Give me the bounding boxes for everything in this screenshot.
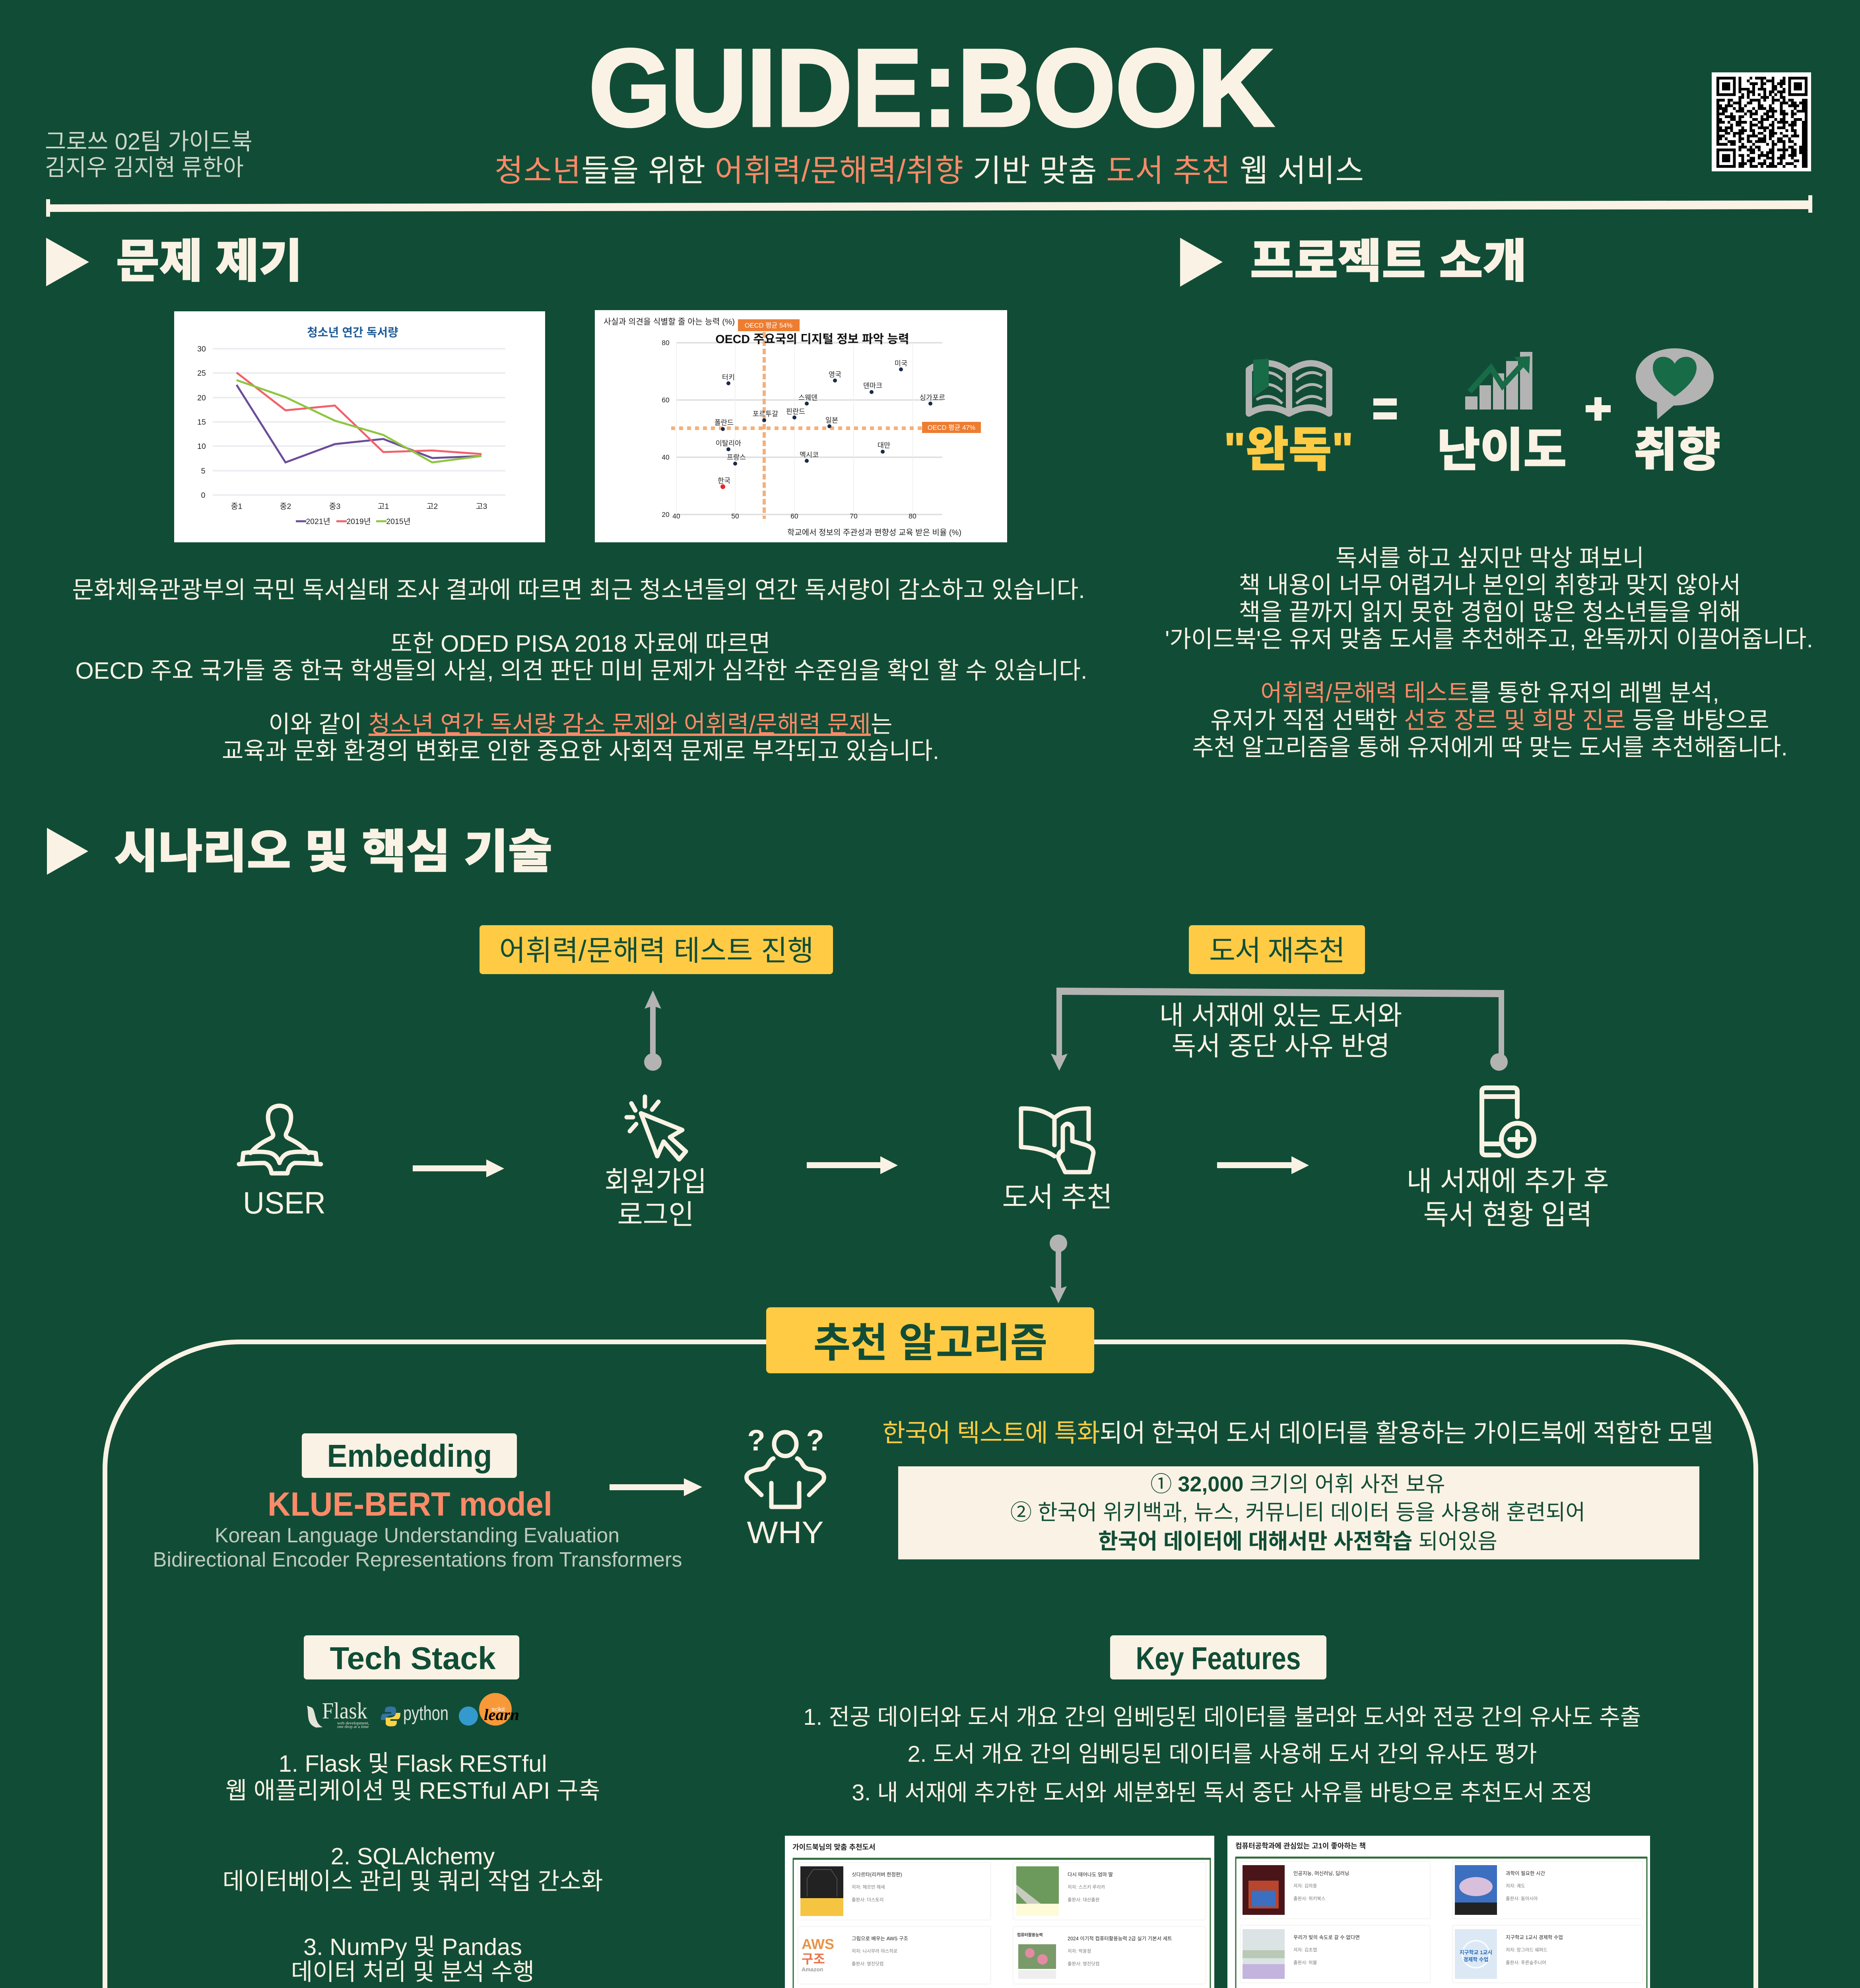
text block: key features list: 2. 도서 개요 간의 임베딩된 데이터를 사용해 도서 간의 유사도 평가 <box>907 1741 1537 1767</box>
label: key features: Key Features <box>1136 1640 1301 1676</box>
line chart: annual reading: 고2 <box>427 502 438 511</box>
loop caption: 독서 중단 사유 반영 <box>1172 1031 1390 1061</box>
screenshot: personalised books: 저자: 스즈키 루리카 <box>1068 1885 1105 1890</box>
label: add to library: 독서 현황 입력 <box>1423 1199 1592 1230</box>
icon: book <box>1249 359 1329 414</box>
text block: tech stack list: 데이터 처리 및 분석 수행 <box>291 1959 534 1985</box>
label: key features <box>1110 1635 1326 1679</box>
scatter chart: OECD digital literacy: 핀란드 <box>786 408 805 415</box>
line chart: annual reading: 0 <box>201 491 206 500</box>
why details box <box>898 1466 1699 1559</box>
label: tech stack: Tech Stack <box>330 1640 496 1676</box>
text block: tech stack list <box>186 1750 639 1988</box>
label: embedding <box>302 1433 517 1478</box>
arrow: to algorithm <box>1050 1235 1067 1303</box>
logos: flask, python, scikit-learn: scikit <box>491 1706 505 1713</box>
screenshot: popular books by major: 저자: 김의중 <box>1293 1883 1317 1889</box>
arrow <box>1217 1156 1309 1174</box>
icon: person questioning <box>747 1424 824 1507</box>
why details box: 한국어 데이터에 대해서만 사전학습 되어있음 <box>1098 1530 1497 1553</box>
arrow <box>807 1156 898 1174</box>
screenshot: personalised books: 2024 이기적 컴퓨터활용능력 2급 실기 기본서 세트 <box>1068 1936 1172 1941</box>
screenshot: personalised books: 저자: 니시무라 야스히로 <box>852 1948 897 1954</box>
team credit <box>45 129 252 181</box>
line chart: annual reading: 중3 <box>329 502 340 511</box>
label: vocabulary test: 어휘력/문해력 테스트 진행 <box>499 935 814 967</box>
scatter chart: OECD digital literacy: 80 <box>909 512 916 520</box>
line chart: annual reading: 2015년 <box>386 517 411 526</box>
arrow <box>413 1159 504 1177</box>
team credit: 그로쓰 02팀 가이드북 <box>45 129 252 155</box>
label: sign up login <box>604 1166 707 1230</box>
scatter chart: OECD digital literacy: 학교에서 정보의 주관성과 편향성 교육 받은 비율 (%) <box>787 528 961 537</box>
model description: Bidirectional Encoder Representations from Transformers <box>153 1548 682 1571</box>
screenshot: personalised books: 다시 태어나도 엄마 딸 <box>1068 1872 1113 1877</box>
line chart: annual reading: 중1 <box>231 502 242 511</box>
label: why: WHY <box>747 1515 824 1550</box>
scatter chart: OECD digital literacy: 70 <box>850 512 858 520</box>
scatter chart: OECD digital literacy: 일본 <box>825 416 838 424</box>
line chart: annual reading: 25 <box>197 369 206 378</box>
logos: flask, python, scikit-learn: learn <box>484 1706 519 1724</box>
heading: scenario: 시나리오 및 핵심 기술 <box>114 826 552 878</box>
book cover: AWS: 구조 <box>802 1952 825 1966</box>
screenshot: personalised books: 출판사: 영진닷컴 <box>1068 1961 1099 1967</box>
label: complete reading: "완독" <box>1224 423 1353 476</box>
panel: recommendation algorithm <box>105 1307 1756 1988</box>
scatter chart: OECD digital literacy: OECD 주요국의 디지털 정보 파악 능력 <box>715 333 909 346</box>
heading: algorithm: 추천 알고리즘 <box>814 1320 1047 1366</box>
scatter chart: OECD digital literacy: 덴마크 <box>863 382 882 390</box>
header rule <box>46 195 1812 217</box>
subtitle: 청소년들을 위한 어휘력/문해력/취향 기반 맞춤 도서 추천 웹 서비스 <box>495 153 1364 188</box>
label: re-recommendation <box>1189 925 1365 974</box>
line chart: annual reading: 중2 <box>280 502 291 511</box>
scatter chart: OECD digital literacy: 대만 <box>878 441 890 449</box>
loop caption: 내 서재에 있는 도서와 <box>1159 1001 1402 1031</box>
panel: scenario and core technology <box>47 826 1609 1303</box>
screenshot: popular books by major: 우리가 빛의 속도로 갈 수 없다면 <box>1293 1935 1360 1940</box>
book cover: speed of light <box>1243 1929 1285 1979</box>
scatter chart: OECD digital literacy: 이탈리아 <box>716 439 741 447</box>
logos: flask, python, scikit-learn: web development, <box>337 1721 369 1726</box>
text block: project description: 추천 알고리즘을 통해 유저에게 딱 맞는 도서를 추천해줍니다. <box>1192 734 1788 761</box>
screenshot: popular books by major: 출판사: 푸른숲주니어 <box>1506 1960 1546 1965</box>
scatter chart: OECD digital literacy: 터키 <box>722 373 735 381</box>
text block: project description: 독서를 하고 싶지만 막상 펴보니 <box>1336 545 1644 571</box>
screenshot: popular books by major: 출판사: 허블 <box>1293 1960 1317 1965</box>
screenshot: popular books by major: 인공지능, 머신러닝, 딥러닝 <box>1293 1871 1349 1876</box>
line chart: annual reading: 고1 <box>378 502 389 511</box>
text block: problem description: 교육과 문화 환경의 변화로 인한 중요한 사회적 문제로 부각되고 있습니다. <box>222 738 939 764</box>
label: vocabulary test <box>480 925 833 974</box>
icon: cursor click <box>627 1097 686 1159</box>
scatter chart: OECD digital literacy: 스웨덴 <box>798 394 817 402</box>
label: difficulty: 난이도 <box>1437 424 1567 476</box>
screenshot: personalised books: 저자: 헤르만 헤세 <box>852 1885 885 1890</box>
icon: user reading <box>239 1106 321 1173</box>
scatter chart: OECD digital literacy: 영국 <box>829 371 841 379</box>
label: add to library <box>1406 1166 1609 1230</box>
scatter chart: OECD digital literacy: 포르투갈 <box>753 410 778 418</box>
book cover: computer skills: 컴퓨터활용능력 <box>1017 1932 1043 1938</box>
screenshot: popular books by major: 지구학교 1교시 경제학 수업 <box>1506 1935 1563 1940</box>
title: GUIDE:BOOK <box>589 27 1274 149</box>
screenshot: popular books by major: 출판사: 동아시아 <box>1506 1896 1538 1901</box>
text block: problem description: 이와 같이 청소년 연간 독서량 감소 문제와 어휘력/문해력 문제는 <box>268 711 893 738</box>
why details box: ② 한국어 위키백과, 뉴스, 커뮤니티 데이터 등을 사용해 훈련되어 <box>1010 1501 1585 1524</box>
scatter chart: OECD digital literacy: 싱가포르 <box>920 394 945 402</box>
book cover: science <box>1455 1865 1497 1915</box>
text block: key features list: 3. 내 서재에 추가한 도서와 세분화된 독서 중단 사유를 바탕으로 추천도서 조정 <box>852 1780 1593 1806</box>
book cover: computer skills <box>1016 1930 1059 1980</box>
text block: project description <box>1165 545 1813 761</box>
scatter chart: OECD digital literacy: 멕시코 <box>800 451 819 459</box>
line chart: annual reading: 20 <box>197 394 206 402</box>
screenshot: personalised books: 싯다르타(리커버 한정판) <box>852 1872 902 1877</box>
scatter chart: OECD digital literacy: 60 <box>790 512 798 520</box>
scatter chart: OECD digital literacy: 한국 <box>718 477 730 485</box>
label: book recommendation: 도서 추천 <box>1002 1182 1113 1213</box>
scatter chart: OECD digital literacy <box>595 310 1007 542</box>
text block: problem description: OECD 주요 국가들 중 한국 학생들의 사실, 의견 판단 미비 문제가 심각한 수준임을 확인 할 수 있습니다. <box>76 657 1087 684</box>
text block: key features list <box>803 1705 1641 1806</box>
line chart: annual reading: 10 <box>197 442 206 451</box>
text block: tech stack list: 데이터베이스 관리 및 쿼리 작업 간소화 <box>223 1868 603 1895</box>
loop caption <box>1159 1001 1402 1061</box>
label: tech stack <box>304 1635 519 1679</box>
text block: project description: 유저가 직접 선택한 선호 장르 및 희망 진로 등을 바탕으로 <box>1210 707 1769 734</box>
scatter chart: OECD digital literacy: OECD 평균 47% <box>928 424 975 431</box>
scatter chart: OECD digital literacy: 50 <box>731 512 739 520</box>
icon: heart bubble <box>1636 348 1714 419</box>
heading: algorithm <box>766 1307 1094 1373</box>
book cover: AWS: Amazon <box>802 1966 823 1972</box>
screenshot: personalised books: 저자: 박윤정 <box>1068 1949 1091 1954</box>
frame <box>105 1342 1756 1988</box>
text block: project description: 책 내용이 너무 어렵거나 본인의 취향과 맞지 않아서 <box>1239 572 1741 598</box>
scatter chart: OECD digital literacy: 40 <box>662 453 670 461</box>
icon: person questioning: ? <box>806 1424 824 1457</box>
label: embedding: Embedding <box>327 1438 492 1474</box>
why headline: 한국어 텍스트에 특화되어 한국어 도서 데이터를 활용하는 가이드북에 적합한 모델 <box>882 1419 1713 1447</box>
model description <box>153 1524 682 1571</box>
text block: project description: '가이드북'은 유저 맞춤 도서를 추천해주고, 완독까지 이끌어줍니다. <box>1165 626 1813 652</box>
screenshot: personalised books: 가이드북님의 맞춤 추천도서 <box>792 1843 876 1851</box>
scatter chart: OECD digital literacy: 20 <box>662 511 670 518</box>
arrow: re-recommendation loop <box>1051 988 1508 1071</box>
screenshot: popular books by major: 저자: 김초엽 <box>1293 1947 1317 1953</box>
book cover: economics <box>1455 1929 1497 1979</box>
screenshot: personalised books: 출판사: 영진닷컴 <box>852 1961 883 1967</box>
screenshot: personalised books: 출판사: 더스토리 <box>852 1897 883 1903</box>
why details box: ① 32,000 크기의 어휘 사전 보유 <box>1150 1472 1445 1496</box>
screenshot: personalised books: 출판사: 대산출판 <box>1068 1897 1100 1903</box>
label: user: USER <box>243 1185 326 1220</box>
screenshot: personalised books: 그림으로 배우는 AWS 구조 <box>852 1936 908 1941</box>
model name: KLUE-BERT model <box>268 1485 552 1523</box>
screenshot: personalised books <box>785 1836 1214 1988</box>
book cover: economics: 경제학 수업 <box>1463 1957 1489 1963</box>
text block: problem description: 문화체육관광부의 국민 독서실태 조사 결과에 따르면 최근 청소년들의 연간 독서량이 감소하고 있습니다. <box>72 577 1085 603</box>
logos: flask, python, scikit-learn: python <box>403 1702 448 1724</box>
icon: person questioning: ? <box>747 1424 765 1457</box>
logos: flask, python, scikit-learn: Flask <box>322 1698 367 1724</box>
panel: project introduction <box>1165 235 1813 761</box>
model description: Korean Language Understanding Evaluation <box>215 1524 619 1547</box>
icon: phone add <box>1482 1088 1534 1156</box>
plus sign <box>1586 397 1611 421</box>
label: sign up login: 로그인 <box>617 1199 694 1230</box>
line chart: annual reading: 5 <box>201 467 206 476</box>
text block: problem description <box>72 577 1087 764</box>
icon: QR code <box>1712 72 1811 171</box>
line chart: annual reading: 15 <box>197 418 206 427</box>
line chart: annual reading: 30 <box>197 345 206 353</box>
text block: tech stack list: 웹 애플리케이션 및 RESTful API 구축 <box>225 1777 600 1804</box>
screenshot: popular books by major: 컴퓨터공학과에 관심있는 고1이 좋아하는 책 <box>1235 1842 1366 1850</box>
heading: problem: 문제 제기 <box>116 235 302 287</box>
screenshot: popular books by major <box>1227 1836 1650 1988</box>
book cover: AWS: AWS <box>802 1936 834 1952</box>
line chart: annual reading: 고3 <box>476 502 487 511</box>
label: taste: 취향 <box>1633 424 1721 476</box>
equals sign <box>1373 398 1397 419</box>
arrow: to test <box>644 990 662 1071</box>
label: sign up login: 회원가입 <box>604 1166 707 1197</box>
arrow <box>610 1478 702 1496</box>
scatter chart: OECD digital literacy: OECD 평균 54% <box>745 322 792 329</box>
screenshot: popular books by major: 저자: 앙그라드 쉐퍼드 <box>1506 1947 1547 1953</box>
scatter chart: OECD digital literacy: 프랑스 <box>727 453 746 461</box>
line chart: annual reading: 청소년 연간 독서량 <box>307 326 398 339</box>
text block: project description: 책을 끝까지 읽지 못한 경험이 많은 청소년들을 위해 <box>1239 599 1741 625</box>
line chart: annual reading: 2021년 <box>306 517 330 526</box>
panel: problem statement <box>46 235 1087 764</box>
scatter chart: OECD digital literacy: 폴란드 <box>714 419 734 427</box>
label: add to library: 내 서재에 추가 후 <box>1406 1166 1609 1197</box>
text block: project description: 어휘력/문해력 테스트를 통한 유저의 레벨 분석, <box>1260 679 1719 706</box>
icon: book and hand <box>1021 1109 1093 1172</box>
text block: key features list: 1. 전공 데이터와 도서 개요 간의 임베딩된 데이터를 불러와 도서와 전공 간의 유사도 추출 <box>803 1705 1641 1730</box>
text block: problem description: 또한 ODED PISA 2018 자료에 따르면 <box>390 630 771 657</box>
scatter chart: OECD digital literacy: 사실과 의견을 식별할 줄 아는 능력 (%) <box>604 317 735 326</box>
book cover: AI <box>1243 1865 1285 1915</box>
screenshot: popular books by major: 저자: 궤도 <box>1506 1883 1525 1889</box>
scatter chart: OECD digital literacy: 60 <box>662 396 670 404</box>
screenshot: popular books by major: 출판사: 위키북스 <box>1293 1896 1325 1901</box>
line chart: annual reading <box>174 311 545 542</box>
book cover: green <box>1016 1866 1059 1916</box>
text block: tech stack list: 2. SQLAlchemy <box>331 1843 495 1870</box>
line chart: annual reading: 2019년 <box>346 517 371 526</box>
team credit: 김지우 김지현 류한아 <box>45 155 244 181</box>
screenshot: popular books by major: 과학이 필요한 시간 <box>1506 1871 1545 1876</box>
text block: tech stack list: 1. Flask 및 Flask RESTful <box>278 1750 547 1777</box>
logos: flask, python, scikit-learn <box>307 1693 519 1729</box>
scatter chart: OECD digital literacy: 40 <box>672 512 680 520</box>
book cover: Siddhartha <box>800 1866 843 1916</box>
logos: flask, python, scikit-learn: one drop at a time <box>337 1724 369 1729</box>
heading: project: 프로젝트 소개 <box>1250 235 1527 287</box>
book cover: AWS <box>800 1930 843 1980</box>
label: re-recommendation: 도서 재추천 <box>1209 935 1345 967</box>
scatter chart: OECD digital literacy: 미국 <box>895 359 907 367</box>
scatter chart: OECD digital literacy: 80 <box>662 339 670 347</box>
book cover: economics: 지구학교 1교시 <box>1460 1949 1492 1955</box>
icon: rising chart <box>1465 352 1532 410</box>
text block: tech stack list: 3. NumPy 및 Pandas <box>303 1934 522 1960</box>
